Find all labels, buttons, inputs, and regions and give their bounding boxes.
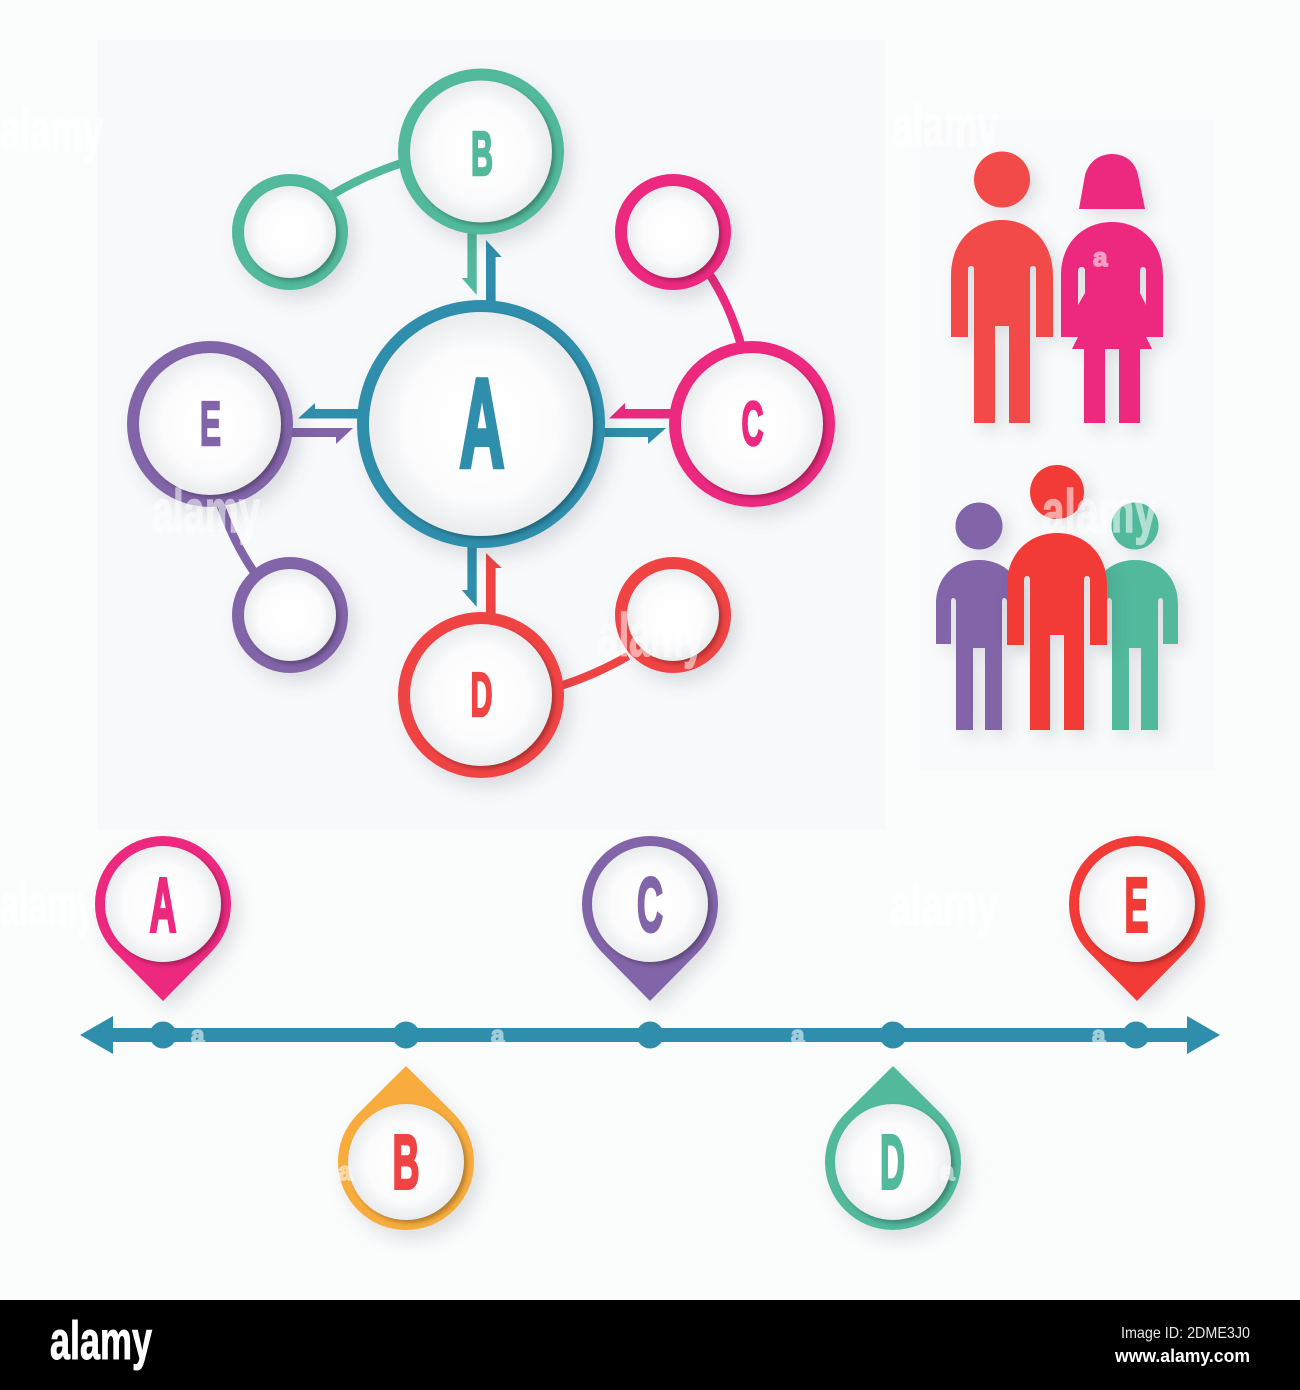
node: B: B [471,120,493,189]
pin: D: D [880,1120,905,1206]
watermarks: a [1092,1022,1106,1049]
node: satellite of D [615,557,731,673]
watermarks: a [940,1156,955,1186]
connector: D to satellite [560,656,628,686]
image id: Image ID: 2DME3J0 [1121,1325,1250,1342]
timeline axis [110,1028,1190,1042]
watermarks: alamy [152,478,260,545]
watermarks: a [1093,242,1108,272]
left arrowhead [80,1016,113,1054]
background watermarks: alamy [890,873,998,938]
pin: A [95,836,231,1001]
node: E [127,341,293,507]
connector: E to satellite [218,497,254,572]
background watermarks: alamy [0,873,96,938]
icon: red person [1007,465,1107,730]
node: satellite of C [615,174,731,290]
pin: D [825,1066,961,1230]
arrow: A to C [602,428,666,444]
timeline markers [150,1022,1150,1048]
background watermarks [0,94,998,938]
panel: people background [920,120,1215,770]
arrow: E to A [290,428,353,444]
footer logo: alamy [50,1311,152,1371]
watermarks: a [791,1022,805,1049]
background watermarks: alamy [0,98,103,163]
connector: C to satellite [708,272,741,345]
node: C [669,341,835,507]
arrow: C to A [609,403,674,418]
icon: group of three [936,465,1178,730]
arrow: B to A [462,225,477,295]
watermarks: alamy [598,602,704,669]
arrow: A to B [486,240,502,304]
node: C: C [742,390,764,459]
pin: A: A [150,862,176,948]
watermarks: a [491,1022,505,1049]
arrow: D to A [486,553,502,617]
icon: couple [951,152,1163,423]
icon: woman [1061,154,1163,423]
background watermarks: alamy [892,94,998,159]
node: D [398,612,564,778]
node: A [357,300,605,548]
node: D: D [470,661,492,730]
panel: network background [97,40,885,830]
connector: B to satellite [330,163,402,196]
watermarks: a [191,1022,205,1049]
icon: green person [1092,502,1178,730]
timeline [80,836,1220,1230]
node: satellite of B [232,174,348,290]
icon: man [951,152,1053,423]
arrow: A to E [298,403,362,418]
arrow: A to D [462,545,477,607]
pin: E [1069,836,1205,1001]
node: E: E [200,390,221,459]
pin: C: C [637,862,663,948]
pin: B [338,1066,474,1230]
network diagram [127,68,835,778]
node: B [398,68,564,234]
watermarks [152,242,1157,1186]
footer bar [0,1300,1300,1390]
right arrowhead [1187,1016,1220,1054]
watermarks: alamy [1042,478,1157,545]
pin: C [582,836,718,1001]
pin: E: E [1124,862,1148,948]
node: A: A [460,352,504,494]
website: www.alamy.com [1114,1346,1250,1366]
pin: B: B [392,1120,420,1206]
watermarks: a [338,1156,353,1186]
node: satellite of E [232,557,348,673]
icon: purple person [936,502,1022,730]
